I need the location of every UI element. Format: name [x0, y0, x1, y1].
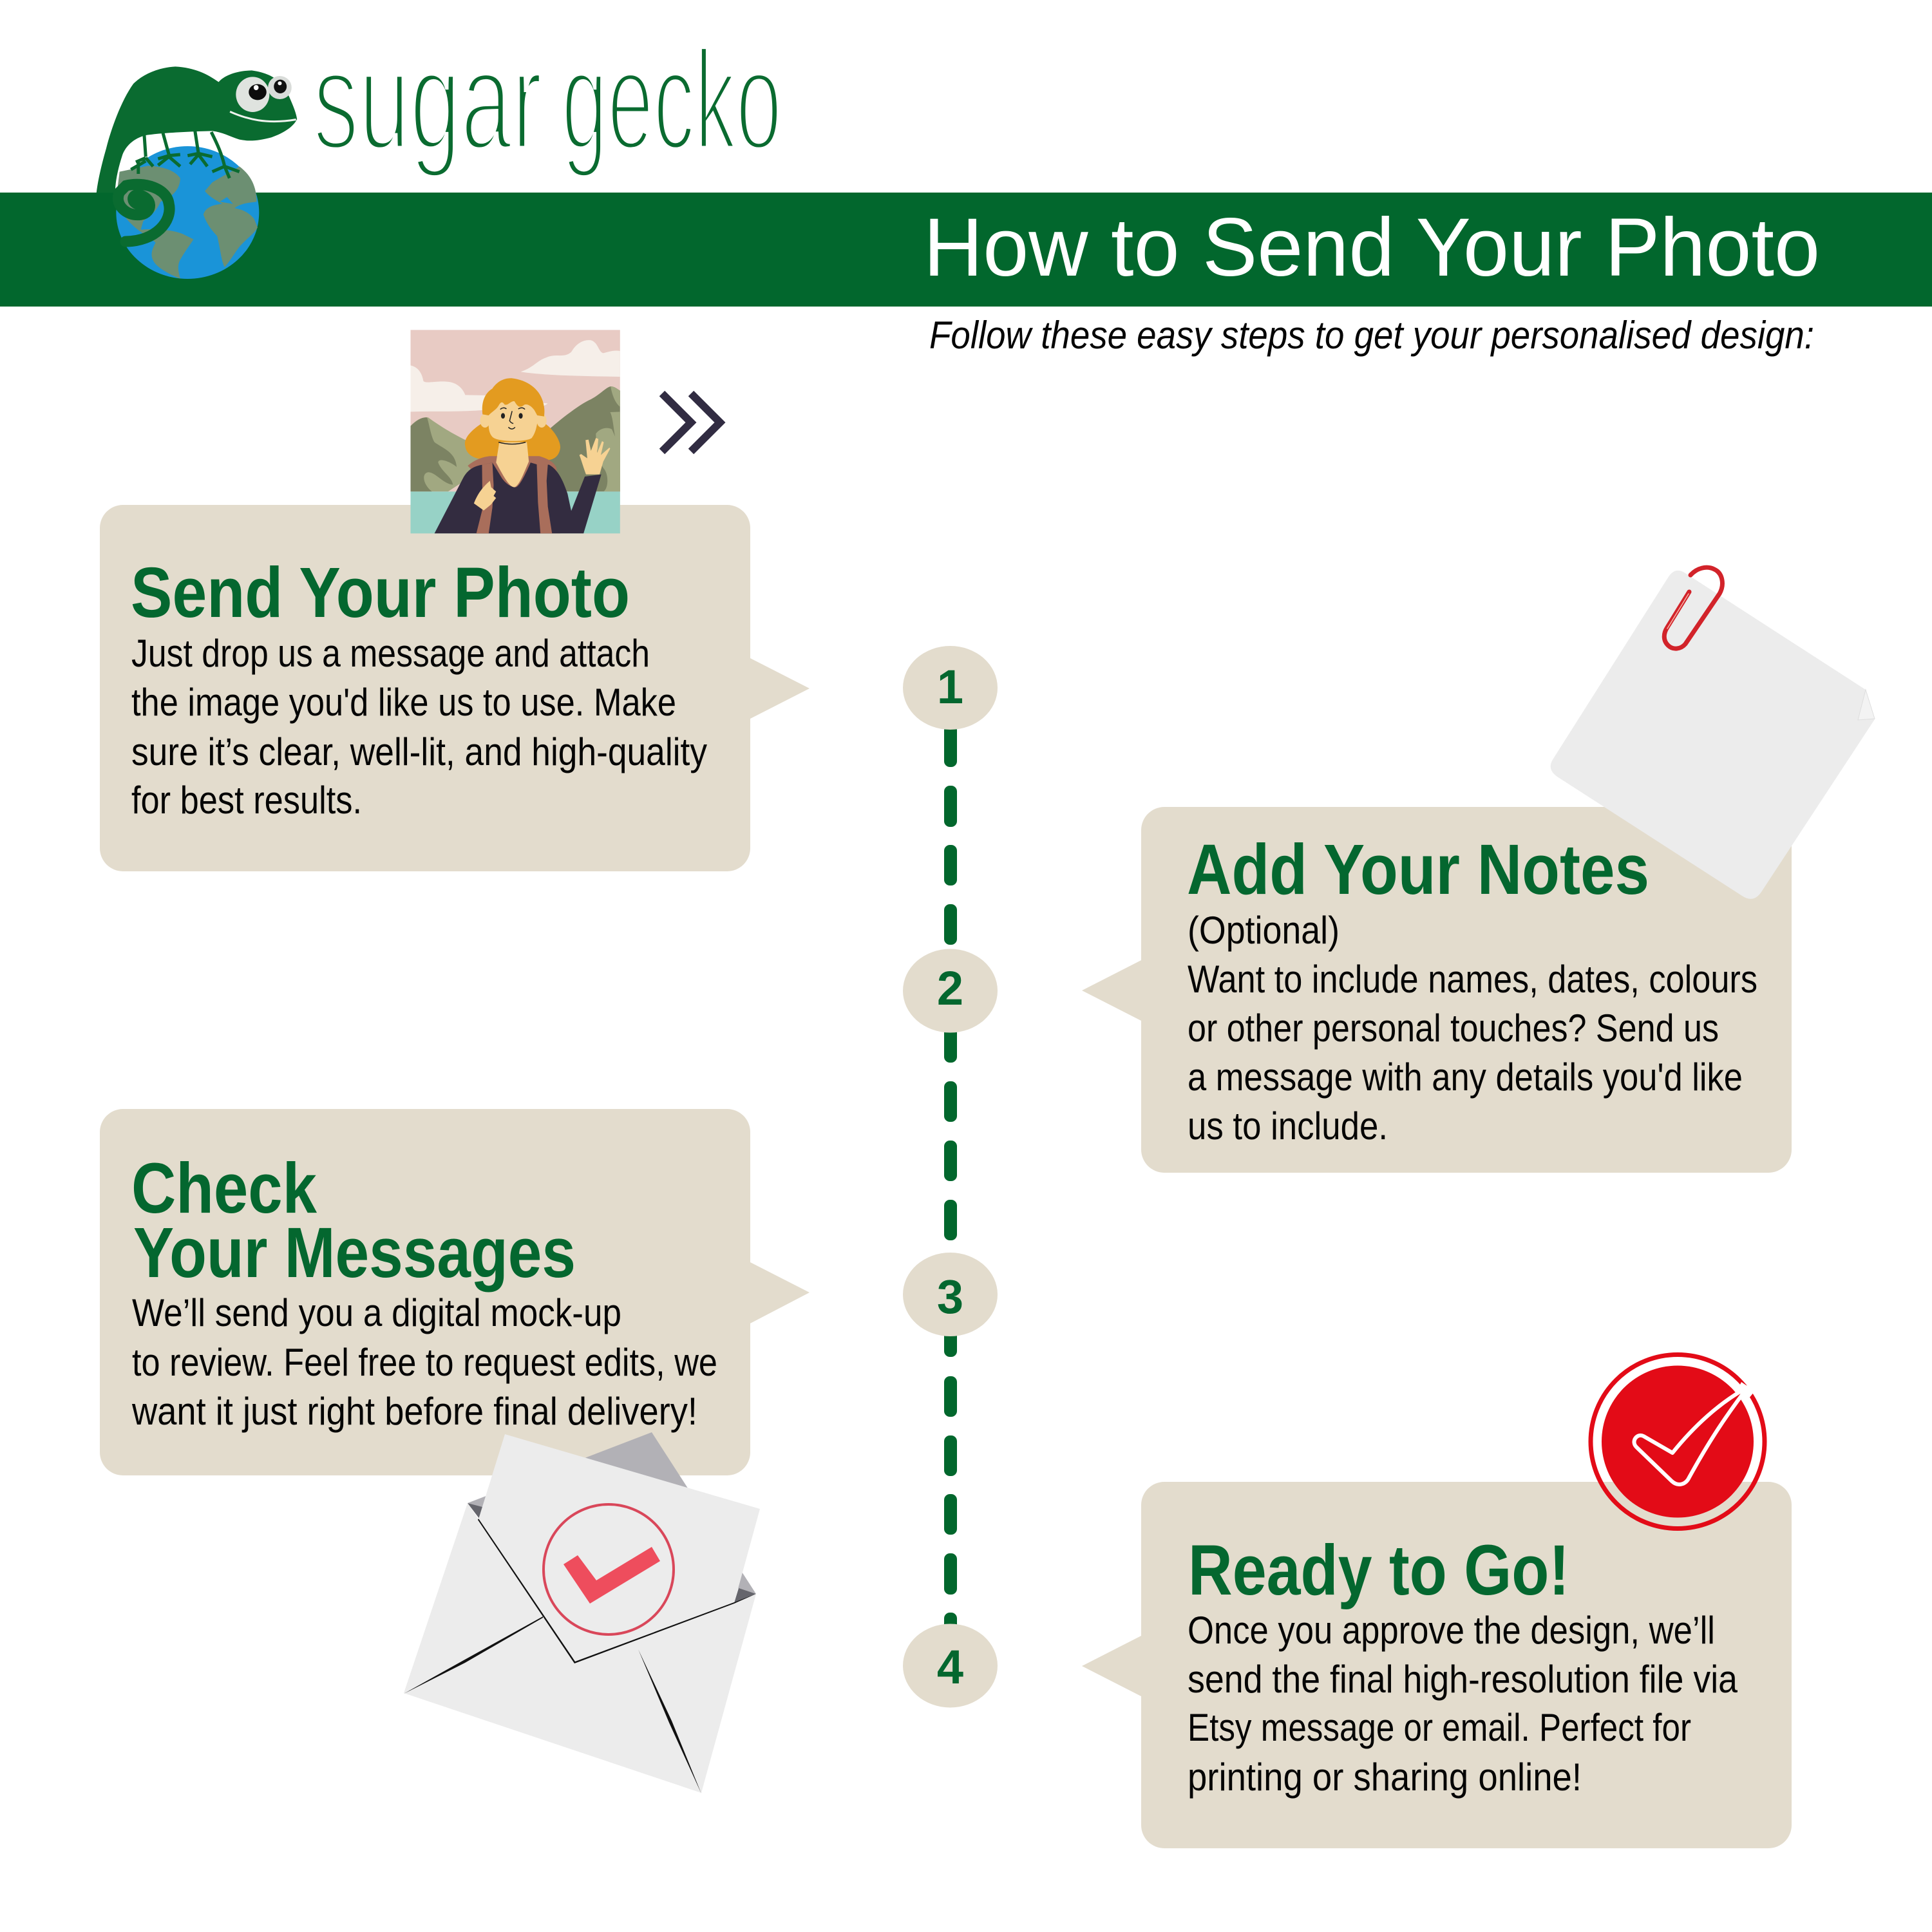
envelope fold lines [404, 1519, 756, 1794]
paperclip [1664, 567, 1722, 649]
body text: want it just right before final delivery! [131, 1390, 697, 1433]
body text: us to include. [1188, 1104, 1388, 1148]
step number 4: 4 [937, 1640, 963, 1694]
subtitle: Follow these easy steps to get your personalised design: [929, 314, 1814, 357]
check mark on letter [564, 1547, 660, 1604]
step number 4 [903, 1624, 998, 1708]
envelope shadow corners [468, 1503, 756, 1603]
heading: Add Your Notes [1187, 830, 1649, 909]
body text: Once you approve the design, we’ll [1188, 1609, 1715, 1652]
illustration: note with paperclip [1551, 567, 1875, 899]
body text: Etsy message or email. Perfect for [1188, 1706, 1691, 1749]
body text [1188, 909, 1757, 1148]
body text: for best results. [131, 779, 362, 822]
panel: step 2 add your notes [1082, 807, 1792, 1173]
step number 3 [903, 1253, 998, 1336]
timeline dashes [944, 724, 957, 1632]
page fold [1858, 690, 1875, 720]
smile [230, 111, 296, 122]
globe [116, 146, 259, 279]
check circle on letter [544, 1504, 674, 1634]
ring gap [1738, 1382, 1755, 1399]
logo: gecko on globe with wordmark [97, 21, 782, 279]
gecko body [97, 66, 297, 193]
near eye [236, 77, 269, 112]
icon: gecko and globe [97, 66, 297, 279]
body text: printing or sharing online! [1188, 1756, 1582, 1799]
envelope body [404, 1503, 756, 1793]
body text: sure it’s clear, well-lit, and high-quality [131, 730, 707, 773]
wordmark: sugar [313, 21, 542, 179]
heading: Check [131, 1149, 317, 1228]
card background with pointer [100, 505, 810, 871]
illustration: photo of woman waving [411, 330, 620, 533]
body text: the image you'd like us to use. Make [131, 681, 676, 724]
illustration: envelope with letter [404, 1432, 760, 1794]
body text: to review. Feel free to request edits, we [132, 1341, 717, 1384]
body text: Want to include names, dates, colours [1188, 958, 1757, 1001]
step number 2 [903, 949, 998, 1033]
badge disc [1602, 1365, 1754, 1517]
step number 3: 3 [937, 1270, 963, 1323]
envelope back flap [468, 1432, 756, 1594]
arrow: double chevron [662, 393, 720, 451]
title: How to Send Your Photo [923, 202, 1820, 294]
step number 1 [903, 646, 998, 730]
body text [131, 632, 707, 822]
icon: red check badge [1591, 1355, 1765, 1529]
heading: Send Your Photo [131, 553, 630, 632]
step number 2: 2 [937, 961, 963, 1015]
panel: step 1 send your photo [100, 505, 810, 871]
body text: a message with any details you'd like [1188, 1056, 1743, 1099]
panel: step 3 check your messages [100, 1109, 810, 1475]
heading: Your Messages [133, 1213, 576, 1293]
body text: or other personal touches? Send us [1188, 1007, 1719, 1050]
body text: Just drop us a message and attach [131, 632, 650, 675]
card background with pointer [1082, 1482, 1792, 1848]
far eye [268, 76, 292, 99]
gecko legs and feet [131, 131, 240, 178]
heading [131, 1149, 576, 1293]
body text [1188, 1609, 1738, 1799]
body text: send the final high-resolution file via [1188, 1658, 1738, 1701]
badge outer ring [1591, 1355, 1765, 1529]
note paper [1551, 571, 1875, 899]
body text [131, 1291, 717, 1433]
check mark [1634, 1387, 1748, 1484]
body text: (Optional) [1188, 909, 1340, 952]
card background with pointer [1082, 807, 1792, 1173]
panel: step 4 ready to go [1082, 1482, 1792, 1848]
letter [478, 1434, 760, 1662]
step number 1: 1 [937, 660, 963, 714]
tail spiral [118, 184, 169, 242]
wordmark: gecko [562, 21, 782, 179]
card background with pointer [100, 1109, 810, 1475]
header band [0, 193, 1932, 307]
body text: We’ll send you a digital mock-up [132, 1291, 621, 1334]
heading: Ready to Go! [1188, 1531, 1569, 1610]
